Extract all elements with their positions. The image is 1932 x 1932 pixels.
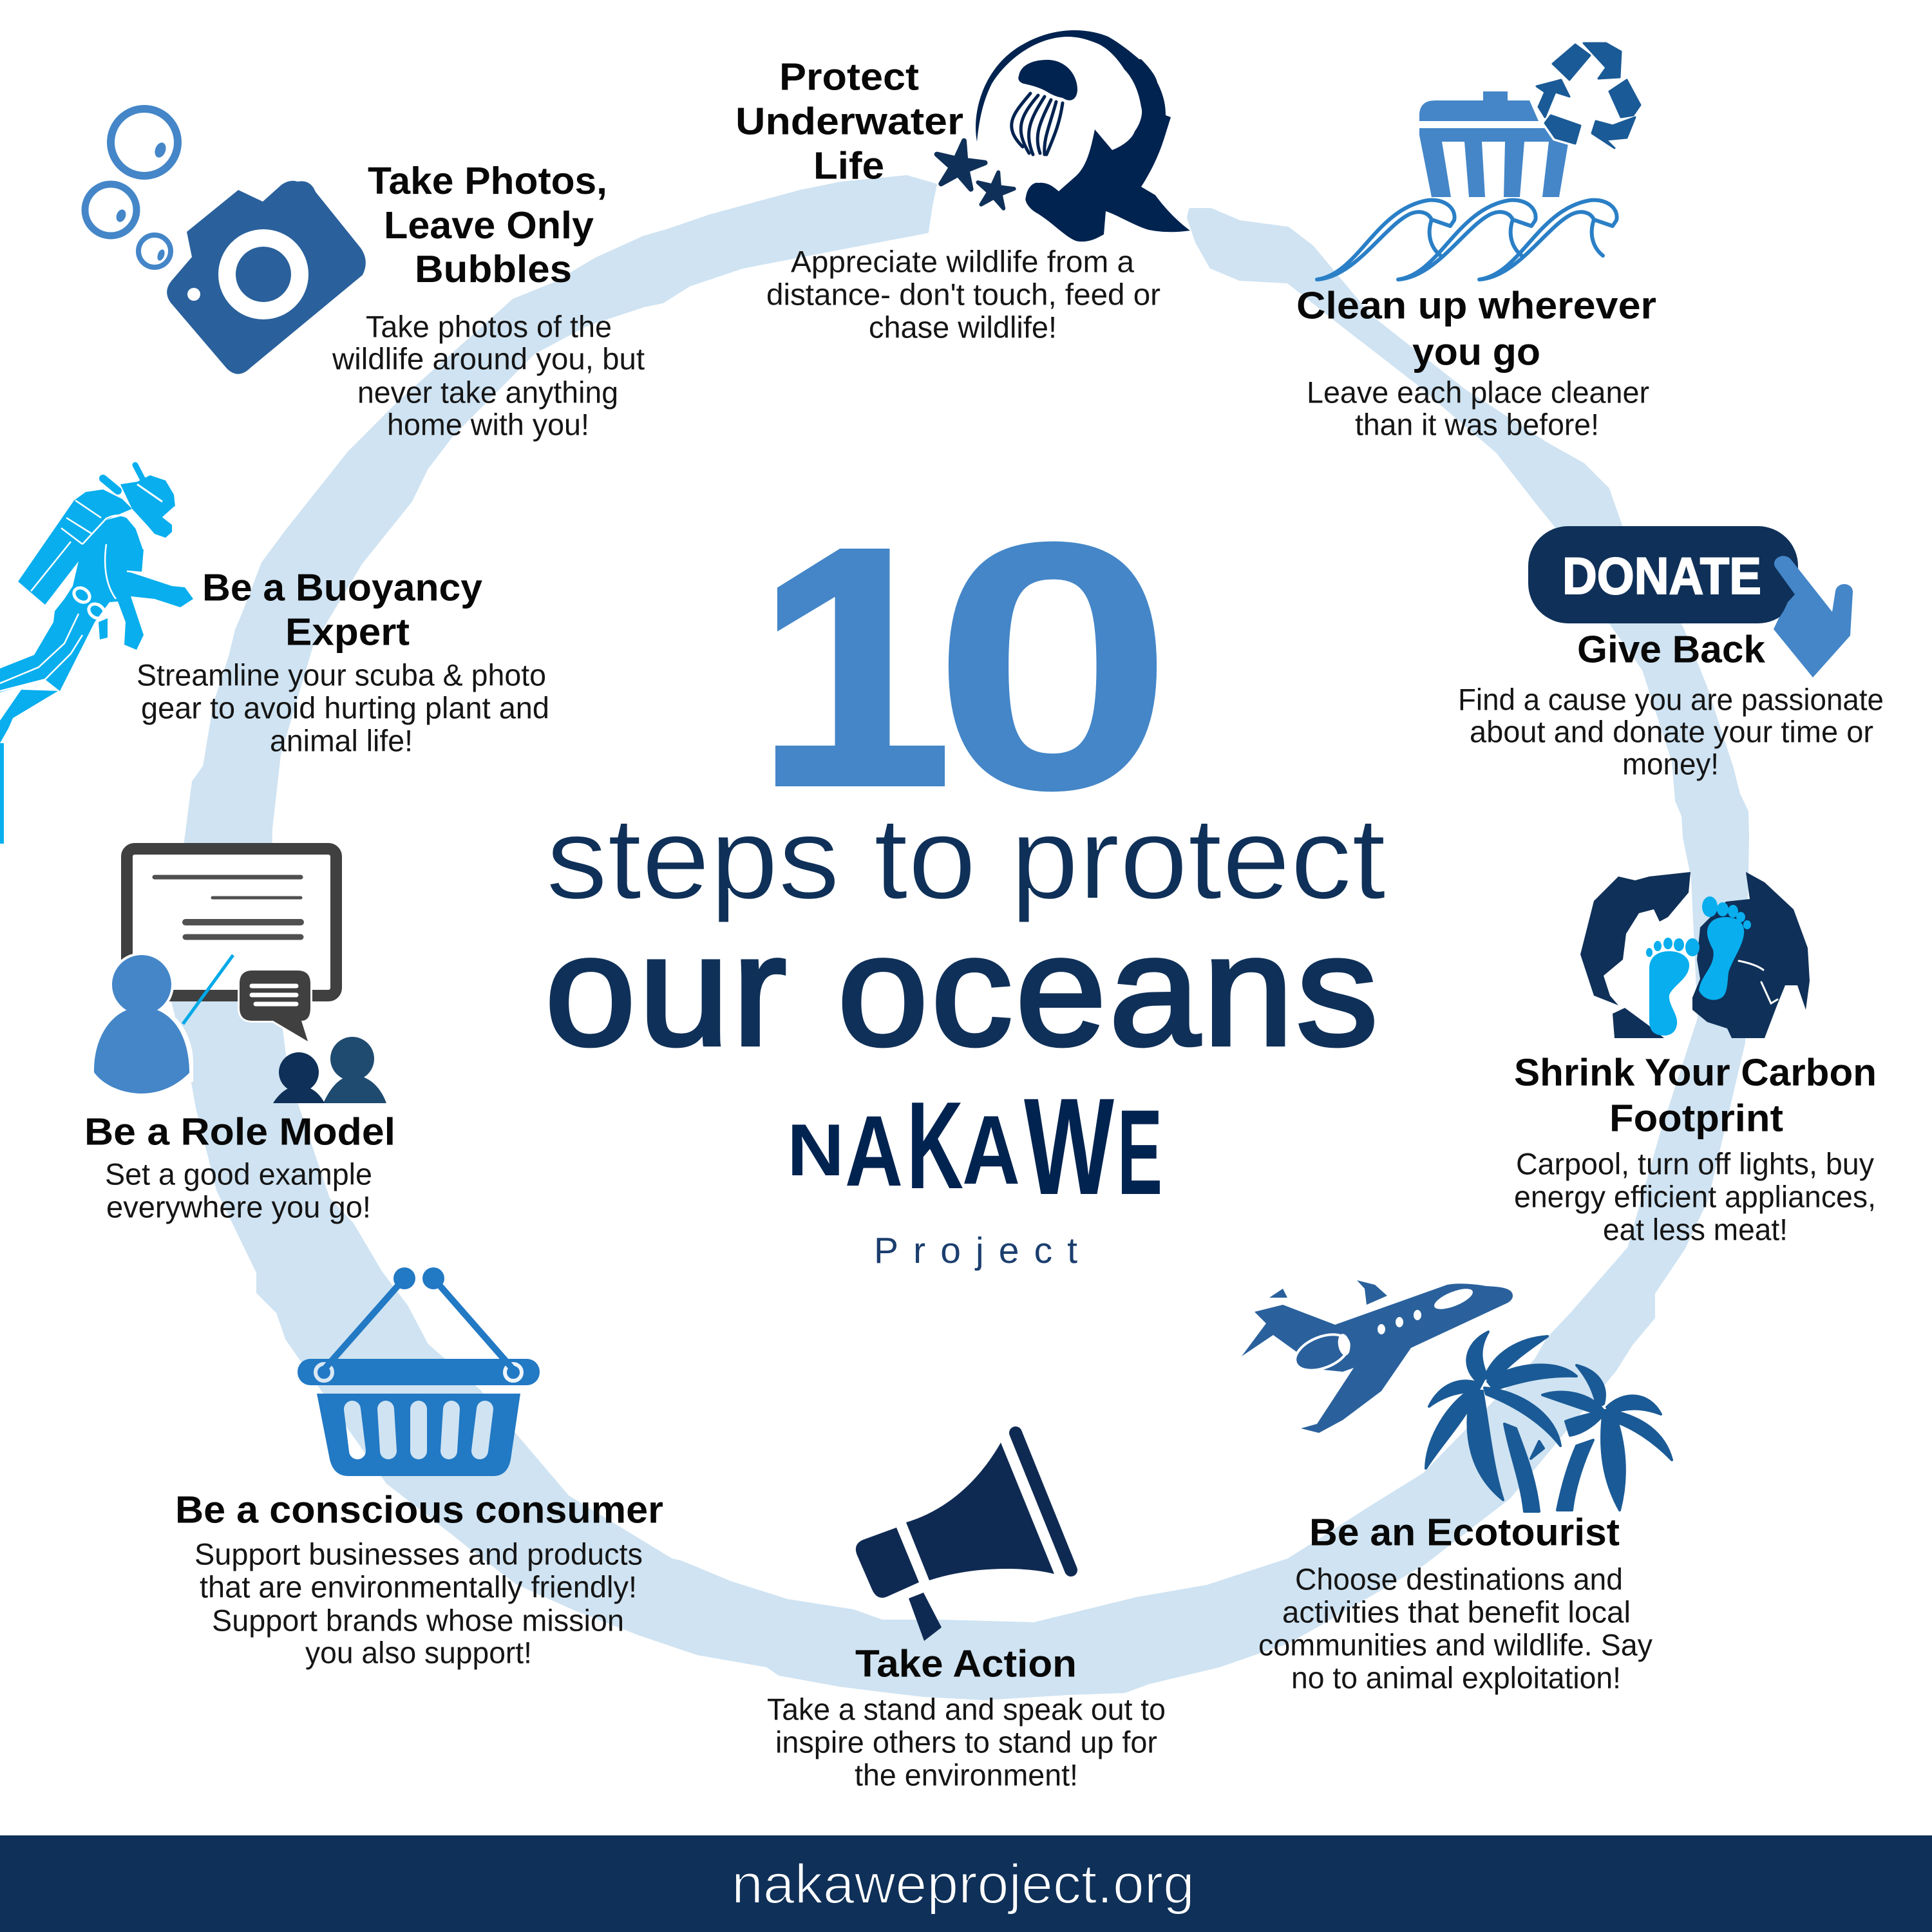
heading: Footprint xyxy=(1609,1097,1783,1140)
body text xyxy=(332,309,645,442)
heading xyxy=(1514,1051,1877,1140)
body text: Carpool, turn off lights, buy xyxy=(1516,1146,1874,1181)
icon: audience xyxy=(273,1037,386,1103)
heading: Expert xyxy=(285,611,410,653)
body text: Take photos of the xyxy=(366,309,612,344)
heading: Be a conscious consumer xyxy=(175,1489,663,1531)
body text: never take anything xyxy=(357,375,618,410)
panel: clean up xyxy=(1296,43,1656,442)
body text: Take a stand and speak out to xyxy=(767,1692,1166,1726)
logo wordmark NAKAWE: K xyxy=(907,1075,963,1215)
body text: energy efficient appliances, xyxy=(1514,1180,1876,1213)
body text: the environment! xyxy=(855,1758,1078,1792)
icon: megaphone xyxy=(856,1433,1071,1641)
body text: no to animal exploitation! xyxy=(1291,1660,1621,1695)
logo wordmark NAKAWE: A xyxy=(845,1095,903,1208)
icon: bubbles xyxy=(85,109,178,267)
icon: pointing hand xyxy=(1774,556,1853,677)
heading: Underwater xyxy=(735,100,963,143)
icon: footprints xyxy=(1646,896,1751,1036)
body text: animal life! xyxy=(270,724,413,757)
heading: Protect xyxy=(779,55,919,98)
body text: gear to avoid hurting plant and xyxy=(141,690,549,725)
panel: take action xyxy=(767,1433,1166,1792)
logo wordmark NAKAWE xyxy=(787,1070,1162,1224)
big number 10: 0 xyxy=(931,469,1175,864)
icon: presentation board xyxy=(127,849,336,996)
heading: Shrink Your Carbon xyxy=(1514,1051,1877,1094)
panel: protect underwater life xyxy=(735,30,1190,344)
body text: wildlife around you, but xyxy=(332,341,645,376)
body text: Find a cause you are passionate xyxy=(1458,683,1884,716)
body text: communities and wildlife. Say xyxy=(1258,1628,1653,1662)
body text xyxy=(767,1692,1166,1792)
icon: shopping basket xyxy=(290,1267,547,1481)
body text: inspire others to stand up for xyxy=(775,1725,1157,1759)
heading: Be an Ecotourist xyxy=(1309,1511,1620,1553)
heading: Leave Only xyxy=(384,204,594,247)
icon: donate button xyxy=(1528,526,1798,623)
heading xyxy=(1296,285,1656,374)
heading: Life xyxy=(813,144,884,187)
title line: our oceans: our oceans xyxy=(545,902,1381,1078)
panel: conscious consumer xyxy=(175,1267,663,1669)
body text: Leave each place cleaner xyxy=(1307,375,1649,410)
body text: about and donate your time or xyxy=(1470,715,1873,748)
heading: Give Back xyxy=(1577,629,1765,671)
body text: Appreciate wildlife from a xyxy=(791,245,1135,278)
body text: money! xyxy=(1622,747,1719,781)
panel: shrink carbon footprint xyxy=(1514,872,1877,1247)
body text: home with you! xyxy=(387,407,589,442)
heading: Take Photos, xyxy=(368,160,607,202)
icon: scuba diver xyxy=(0,465,193,844)
panel: buoyancy expert xyxy=(0,465,549,844)
body text: Support brands whose mission xyxy=(212,1604,624,1637)
icon: trash bin xyxy=(1419,91,1568,197)
body text xyxy=(1458,683,1884,781)
icon: hammerhead shark xyxy=(976,30,1190,242)
footer bar xyxy=(0,1835,1932,1932)
icon: speech bubble xyxy=(240,971,310,1041)
logo wordmark NAKAWE: N xyxy=(787,1110,844,1191)
icon: airplane xyxy=(1242,1280,1513,1433)
icon: starfish xyxy=(932,137,1016,210)
body text: Support businesses and products xyxy=(194,1537,643,1571)
heading: you go xyxy=(1412,331,1540,374)
icon: globe xyxy=(1580,872,1810,1038)
panel: be an ecotourist xyxy=(1242,1280,1672,1695)
heading: Be a Buoyancy xyxy=(202,567,482,609)
body text xyxy=(194,1537,643,1669)
heading: Take Action xyxy=(855,1642,1077,1685)
icon: presenter xyxy=(90,952,233,1094)
body text xyxy=(105,1157,372,1224)
body text: you also support! xyxy=(305,1636,532,1669)
body text xyxy=(1258,1562,1653,1695)
logo wordmark NAKAWE: A xyxy=(962,1095,1020,1205)
body text: chase wildlife! xyxy=(869,310,1057,344)
body text: eat less meat! xyxy=(1603,1212,1788,1247)
body text: than it was before! xyxy=(1355,407,1599,442)
body text: that are environmentally friendly! xyxy=(200,1570,637,1604)
body text: distance- don't touch, feed or xyxy=(766,277,1160,312)
panel: role model xyxy=(84,849,395,1224)
icon: donate button: DONATE xyxy=(1562,547,1761,605)
panel: give back xyxy=(1458,526,1884,781)
body text xyxy=(1307,375,1649,442)
logo wordmark NAKAWE: W xyxy=(1024,1070,1114,1224)
footer url: nakaweproject.org xyxy=(732,1853,1195,1915)
big number 10: 1 xyxy=(757,478,951,855)
icon: jellyfish xyxy=(1012,60,1077,155)
body text xyxy=(1514,1146,1876,1247)
logo subtitle Project: Project xyxy=(874,1230,1077,1271)
panel: take photos xyxy=(85,109,645,442)
icon: waves xyxy=(1317,200,1617,279)
icon: recycling symbol xyxy=(1537,43,1640,148)
logo wordmark NAKAWE: E xyxy=(1117,1084,1162,1220)
heading: Clean up wherever xyxy=(1296,285,1656,327)
brush-stroke ring xyxy=(173,176,1748,1699)
heading xyxy=(202,567,482,653)
body text: Choose destinations and xyxy=(1295,1562,1623,1596)
heading: Bubbles xyxy=(415,248,572,290)
body text xyxy=(766,245,1160,344)
body text: activities that benefit local xyxy=(1282,1595,1631,1629)
body text xyxy=(137,658,549,757)
body text: everywhere you go! xyxy=(106,1190,371,1224)
big number 10 xyxy=(757,469,1175,864)
heading xyxy=(368,160,607,290)
body text: Set a good example xyxy=(105,1157,372,1191)
body text: Streamline your scuba & photo xyxy=(137,658,546,692)
title line: steps to protect: steps to protect xyxy=(546,793,1386,923)
heading xyxy=(735,55,963,187)
central title block xyxy=(545,469,1386,1271)
icon: camera xyxy=(167,181,366,374)
heading: Be a Role Model xyxy=(84,1110,395,1153)
icon: palm trees xyxy=(1426,1332,1672,1511)
